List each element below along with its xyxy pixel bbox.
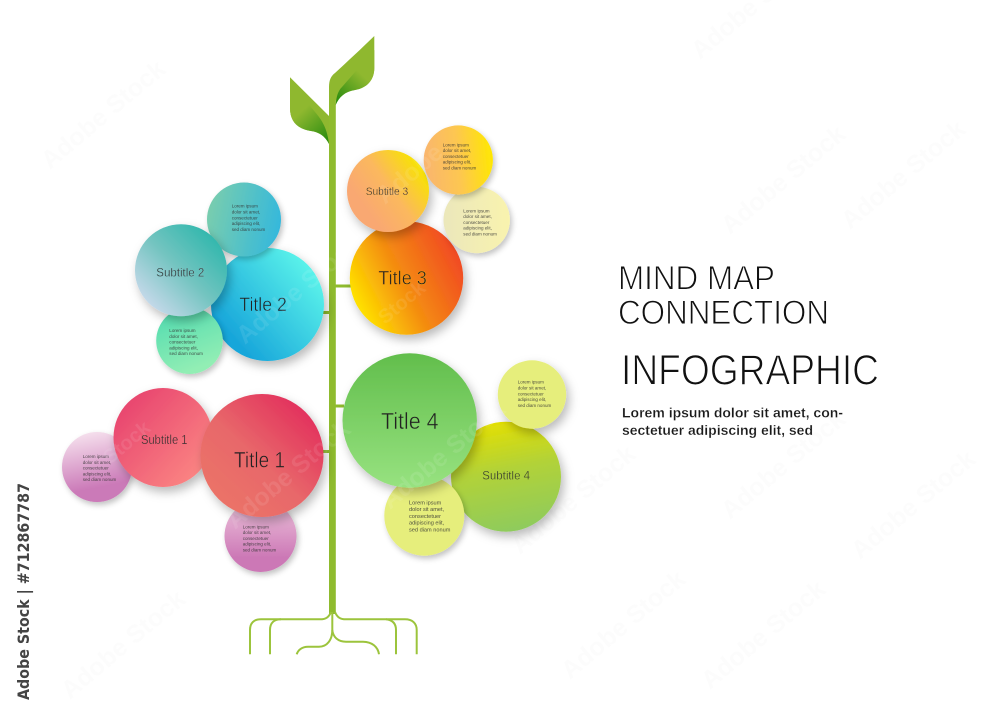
text: branch 2 lower note: Lorem ipsum [169, 328, 196, 333]
group: branch 3 [347, 125, 510, 335]
circle: Subtitle 2 [135, 224, 227, 316]
label: Title 1: Title 1 [234, 448, 285, 472]
text: branch 1 lower note: Lorem ipsum [243, 524, 269, 529]
text: branch 2 upper note: Lorem ipsum [232, 204, 258, 209]
icon: left leaf [290, 77, 329, 144]
heading: MIND MAP CONNECTION: CONNECTION [618, 294, 829, 332]
circle: Subtitle 1 [114, 388, 212, 487]
label: Title 4: Title 4 [381, 408, 439, 434]
heading: INFOGRAPHIC: INFOGRAPHIC [621, 346, 879, 394]
text: branch 1 lower note: dolor sit amet, [243, 530, 271, 535]
text: branch 1 left note: sed diam nonum [83, 477, 117, 482]
text: branch 1 left note: consectetuer [83, 466, 109, 471]
circle: Title 4 [342, 353, 477, 488]
label: Subtitle 4: Subtitle 4 [482, 468, 530, 482]
circle: Title 1 [200, 394, 324, 517]
text: branch 4 lower note: dolor sit amet, [409, 507, 445, 513]
text block: description [622, 406, 843, 438]
text: branch 4 right note: Lorem ipsum [518, 380, 544, 385]
text: branch 3 cream note: consectetuer [463, 220, 490, 225]
text: branch 3 orange note: dolor sit amet, [443, 148, 471, 153]
text: branch 2 lower note: adipiscing elit, [169, 345, 198, 350]
text: branch 3 cream note: dolor sit amet, [463, 214, 492, 219]
background watermark: Adobe Stock [506, 440, 641, 560]
circle: Title 2 [211, 248, 324, 361]
circle: branch 4 right note [498, 360, 566, 429]
heading: MIND MAP CONNECTION [618, 260, 829, 332]
circle: branch 3 orange note [424, 125, 493, 195]
text: branch 3 orange note: Lorem ipsum [443, 142, 469, 147]
label: Title 3: Title 3 [378, 268, 427, 290]
text: branch 4 lower note: sed diam nonum [409, 528, 451, 534]
text: branch 4 lower note: Lorem ipsum [409, 500, 442, 506]
group: branch 2 [135, 182, 324, 374]
text: branch 2 lower note: dolor sit amet, [169, 334, 198, 339]
text: branch 1 left note: dolor sit amet, [83, 460, 111, 465]
circle: branch 2 upper note [207, 182, 281, 256]
text: branch 3 cream note: sed diam nonum [463, 232, 497, 236]
group: branch 4 [342, 353, 566, 556]
text: branch 2 lower note: consectetuer [169, 340, 196, 345]
watermark over circles: Adobe [371, 138, 449, 210]
text: branch 2 upper note: dolor sit amet, [232, 210, 260, 214]
text: branch 4 right note: dolor sit amet, [518, 386, 546, 390]
circle: branch 2 lower note [156, 307, 223, 374]
label: Subtitle 1: Subtitle 1 [141, 433, 188, 447]
circle: branch 1 left note [62, 432, 132, 502]
watermark over circles: Stock [99, 416, 156, 469]
background watermark: Adobe Stock [716, 405, 851, 525]
roots [250, 612, 417, 654]
background watermark: Adobe Stock [716, 120, 851, 240]
text: branch 2 upper note: sed diam nonum [232, 227, 266, 232]
text: branch 1 lower note: consectetuer [243, 536, 269, 541]
text: branch 2 lower note: sed diam nonum [169, 351, 203, 356]
text: branch 4 lower note: adipiscing elit, [409, 521, 445, 527]
text: branch 4 lower note: consectetuer [409, 514, 441, 520]
circle: Subtitle 3 [347, 150, 429, 232]
background watermark: Adobe Stock [846, 445, 981, 565]
background watermark: Adobe Stock [36, 55, 171, 175]
text: branch 3 orange note: sed diam nonum [443, 166, 477, 170]
text: branch 3 orange note: consectetuer [443, 154, 469, 159]
background watermark: Adobe Stock [56, 585, 191, 705]
label: Subtitle 2: Subtitle 2 [156, 265, 205, 279]
label: Title 2: Title 2 [239, 294, 287, 316]
text: branch 2 upper note: consectetuer [232, 215, 258, 220]
group: branch 1 [62, 388, 324, 572]
background watermark: Adobe Stock [696, 575, 831, 695]
background watermark: Adobe Stock [836, 115, 971, 235]
text: branch 4 right note: adipiscing elit, [518, 397, 546, 402]
text: branch 1 left note: Lorem ipsum [83, 454, 109, 459]
watermark over circles: Stock [374, 276, 431, 329]
text: branch 4 right note: consectetuer [518, 391, 544, 396]
text block: description: sectetuer adipiscing elit, sed [622, 423, 813, 438]
circle: Subtitle 4 [451, 422, 561, 532]
text: branch 4 right note: sed diam nonum [518, 403, 552, 408]
icon: right leaf [329, 36, 374, 105]
stock credit: Adobe Stock | #712867787 [14, 483, 34, 700]
text: branch 3 orange note: adipiscing elit, [443, 160, 471, 165]
text: branch 2 upper note: adipiscing elit, [232, 221, 260, 226]
watermark over circles: Adobe Stock [221, 415, 356, 535]
text block: description: Lorem ipsum dolor sit amet, con- [622, 406, 843, 421]
circle: branch 3 cream note [444, 187, 510, 253]
text: branch 1 lower note: adipiscing elit, [243, 542, 271, 547]
watermark over circles: Adobe Stock [231, 230, 366, 350]
text: branch 1 lower note: sed diam nonum [243, 548, 277, 552]
text: branch 3 cream note: Lorem ipsum [463, 208, 490, 213]
label: Subtitle 3: Subtitle 3 [366, 186, 408, 198]
background watermark: Adobe Stock [556, 565, 691, 685]
plant stem with connectors [323, 88, 351, 614]
heading: MIND MAP CONNECTION: MIND MAP [618, 260, 775, 298]
text: branch 1 left note: adipiscing elit, [83, 471, 111, 476]
circle: branch 1 lower note [224, 500, 296, 572]
circle: branch 4 lower note [384, 476, 464, 556]
watermark over circles [99, 138, 511, 535]
circle: Title 3 [350, 221, 463, 335]
watermark over circles: Adobe Stock [376, 395, 511, 515]
text: branch 3 cream note: adipiscing elit, [463, 226, 492, 231]
